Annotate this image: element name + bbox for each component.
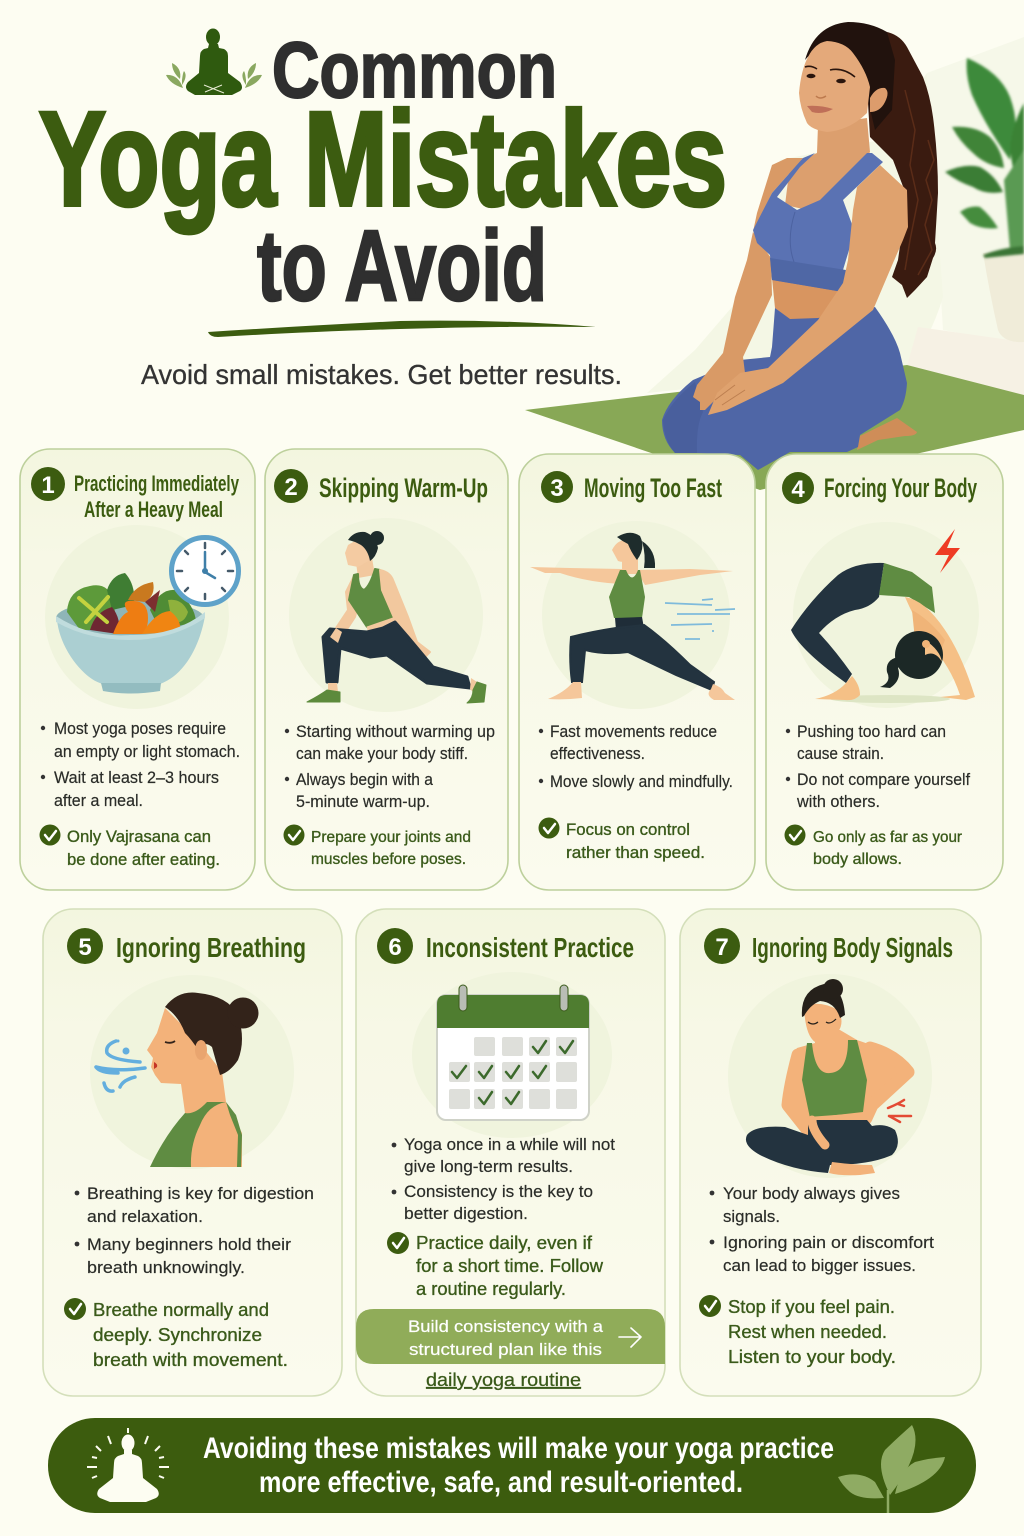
illustration: habit calendar bbox=[412, 972, 612, 1138]
illustration: seated woman holding back bbox=[728, 974, 932, 1178]
closing message: Avoiding these mistakes will make your yoga practice bbox=[203, 1432, 834, 1465]
bullets 2 bbox=[285, 723, 495, 811]
heading 1 bbox=[74, 471, 240, 522]
leggings bbox=[662, 307, 907, 470]
illustration: salad bowl and clock bbox=[45, 525, 238, 709]
number badge 6 bbox=[377, 928, 413, 964]
yoga mat bbox=[525, 365, 1024, 490]
illustration: lunge stretch bbox=[289, 518, 486, 712]
number badge 4 bbox=[782, 472, 814, 504]
hair crown bbox=[805, 22, 895, 130]
shoes bbox=[307, 690, 340, 702]
title: Yoga Mistakes bbox=[39, 85, 727, 234]
ponytail bbox=[868, 32, 938, 298]
number badge 5: 5 bbox=[78, 934, 92, 961]
illustration: breathing profile bbox=[90, 975, 294, 1169]
bullets 3: effectiveness. bbox=[550, 745, 645, 763]
tip 2: muscles before poses. bbox=[311, 851, 466, 868]
tip 7: Listen to your body. bbox=[728, 1347, 896, 1367]
leggings bbox=[323, 622, 470, 688]
tip 5: breath with movement. bbox=[93, 1350, 288, 1370]
tip 2 bbox=[284, 824, 471, 868]
tip 6 bbox=[387, 1232, 604, 1299]
number badge 5 bbox=[67, 928, 103, 964]
bullets 3: Fast movements reduce bbox=[550, 723, 717, 741]
pot bbox=[983, 250, 1024, 342]
tip 4: body allows. bbox=[813, 851, 902, 868]
number badge 1: 1 bbox=[41, 472, 55, 499]
bullets 5: Breathing is key for digestion bbox=[87, 1184, 314, 1203]
bullets 5: Many beginners hold their bbox=[87, 1235, 291, 1254]
front arm bbox=[380, 570, 430, 657]
heading 1: Practicing Immediately bbox=[74, 471, 240, 496]
footer banner bbox=[48, 1418, 976, 1513]
icon: arrow bbox=[619, 1328, 641, 1347]
icon: leaf sprig bbox=[838, 1425, 945, 1513]
tip 3 bbox=[538, 818, 705, 862]
tip 1 bbox=[40, 824, 220, 869]
number badge 7: 7 bbox=[715, 934, 729, 961]
call-to-action banner: Build consistency with a bbox=[408, 1317, 604, 1336]
bullets 4: Do not compare yourself bbox=[797, 771, 970, 789]
bullets 7: Ignoring pain or discomfort bbox=[723, 1234, 934, 1252]
tip 4 bbox=[784, 824, 963, 868]
bullets 5: breath unknowingly. bbox=[87, 1258, 245, 1277]
bullets 7: Your body always gives bbox=[723, 1185, 900, 1203]
bullets 2: Always begin with a bbox=[296, 771, 434, 789]
tip 7 bbox=[699, 1295, 896, 1367]
bullets 1: an empty or light stomach. bbox=[54, 743, 240, 761]
number badge 2 bbox=[274, 469, 308, 503]
tip 1: Only Vajrasana can bbox=[67, 827, 211, 846]
panel: 1 practicing after a heavy meal bbox=[20, 449, 255, 890]
heading 2: Skipping Warm-Up bbox=[319, 473, 488, 503]
title: Common bbox=[272, 25, 557, 114]
left arm bbox=[693, 158, 803, 410]
ear bbox=[870, 88, 888, 112]
right arm and hand bbox=[708, 165, 908, 415]
tip 5: Breathe normally and bbox=[93, 1300, 269, 1320]
panel: 2 skipping warm-up bbox=[265, 449, 508, 890]
panel: 5 ignoring breathing bbox=[43, 909, 342, 1396]
facial features bbox=[805, 66, 855, 113]
icon: glowing meditator bbox=[87, 1428, 169, 1502]
bullets 1 bbox=[41, 720, 240, 810]
panel: 6 inconsistent practice bbox=[356, 909, 665, 1396]
bullets 7: can lead to bigger issues. bbox=[723, 1257, 916, 1275]
subtitle: Avoid small mistakes. Get better results. bbox=[141, 359, 622, 390]
number badge 6: 6 bbox=[388, 934, 402, 961]
title icon: meditating figure with leaves bbox=[166, 28, 262, 95]
tip 4: Go only as far as your bbox=[813, 829, 963, 846]
bullets 3 bbox=[539, 723, 733, 791]
tip 6: for a short time. Follow bbox=[416, 1256, 604, 1276]
brush underline bbox=[208, 321, 596, 337]
title bbox=[39, 25, 727, 322]
bullets 2: Starting without warming up bbox=[296, 723, 495, 741]
bullets 5: and relaxation. bbox=[87, 1207, 203, 1226]
bullets 7 bbox=[710, 1185, 934, 1275]
title: to Avoid bbox=[257, 210, 547, 322]
bullets 6: better digestion. bbox=[404, 1205, 528, 1223]
heading 3: Moving Too Fast bbox=[584, 473, 722, 503]
closing message bbox=[203, 1432, 834, 1499]
bullets 1: Most yoga poses require bbox=[54, 720, 226, 738]
illustration: strained backbend bbox=[791, 522, 979, 708]
illustration: warrior pose with speed lines bbox=[530, 521, 735, 709]
heading 5: Ignoring Breathing bbox=[116, 932, 306, 963]
number badge 4: 4 bbox=[791, 476, 805, 503]
neck and chest skin bbox=[785, 118, 870, 215]
tip 1: be done after eating. bbox=[67, 850, 220, 869]
woman seated in vajrasana bbox=[662, 22, 938, 470]
link: daily yoga routine: daily yoga routine bbox=[426, 1370, 581, 1390]
bullets 5 bbox=[75, 1184, 314, 1277]
bullets 6: give long-term results. bbox=[404, 1158, 573, 1176]
bullets 4: cause strain. bbox=[797, 745, 884, 763]
foot bbox=[857, 418, 917, 450]
hero background: blob, wall, floor and plant bbox=[647, 37, 1024, 396]
heading 1: After a Heavy Meal bbox=[84, 497, 223, 522]
face bbox=[799, 41, 870, 132]
head bbox=[345, 538, 374, 567]
bullets 6: Yoga once in a while will not bbox=[404, 1136, 615, 1154]
bullets 1: after a meal. bbox=[54, 792, 143, 810]
neck bbox=[356, 558, 375, 578]
midriff bbox=[772, 278, 843, 320]
number badge 7 bbox=[704, 928, 740, 964]
closing message: more effective, safe, and result-oriented. bbox=[259, 1466, 743, 1499]
tip 7: Rest when needed. bbox=[728, 1322, 887, 1342]
call-to-action banner: structured plan like this bbox=[409, 1340, 602, 1359]
tip 3: Focus on control bbox=[566, 820, 690, 839]
number badge 1 bbox=[31, 467, 65, 501]
tip 2: Prepare your joints and bbox=[311, 829, 471, 846]
number badge 3 bbox=[541, 471, 573, 503]
sports top bbox=[753, 153, 883, 292]
tip 5 bbox=[64, 1298, 288, 1370]
tank top bbox=[349, 569, 393, 627]
panel: 7 ignoring body signals bbox=[680, 909, 981, 1396]
bullets 7: signals. bbox=[723, 1208, 780, 1226]
back arm bbox=[330, 576, 362, 643]
panel: 3 moving too fast bbox=[519, 454, 755, 890]
bullets 2: 5-minute warm-up. bbox=[296, 793, 430, 811]
bullets 6: Consistency is the key to bbox=[404, 1183, 593, 1201]
panel: 4 forcing your body bbox=[766, 454, 1003, 890]
bullets 4: with others. bbox=[796, 793, 880, 811]
tip 7: Stop if you feel pain. bbox=[728, 1297, 895, 1317]
number badge 3: 3 bbox=[550, 475, 564, 502]
bullets 4 bbox=[786, 723, 970, 811]
number badge 2: 2 bbox=[284, 474, 298, 501]
tip 6: Practice daily, even if bbox=[416, 1233, 593, 1253]
bullets 1: Wait at least 2–3 hours bbox=[54, 769, 219, 787]
bullets 4: Pushing too hard can bbox=[797, 723, 946, 741]
tip 3: rather than speed. bbox=[566, 843, 705, 862]
bullets 6 bbox=[392, 1136, 615, 1223]
bullets 3: Move slowly and mindfully. bbox=[550, 773, 733, 791]
call-to-action banner bbox=[356, 1309, 665, 1364]
tip 6: a routine regularly. bbox=[416, 1279, 566, 1299]
tip 5: deeply. Synchronize bbox=[93, 1325, 262, 1345]
bullets 2: can make your body stiff. bbox=[296, 745, 468, 763]
heading 6: Inconsistent Practice bbox=[426, 932, 634, 963]
